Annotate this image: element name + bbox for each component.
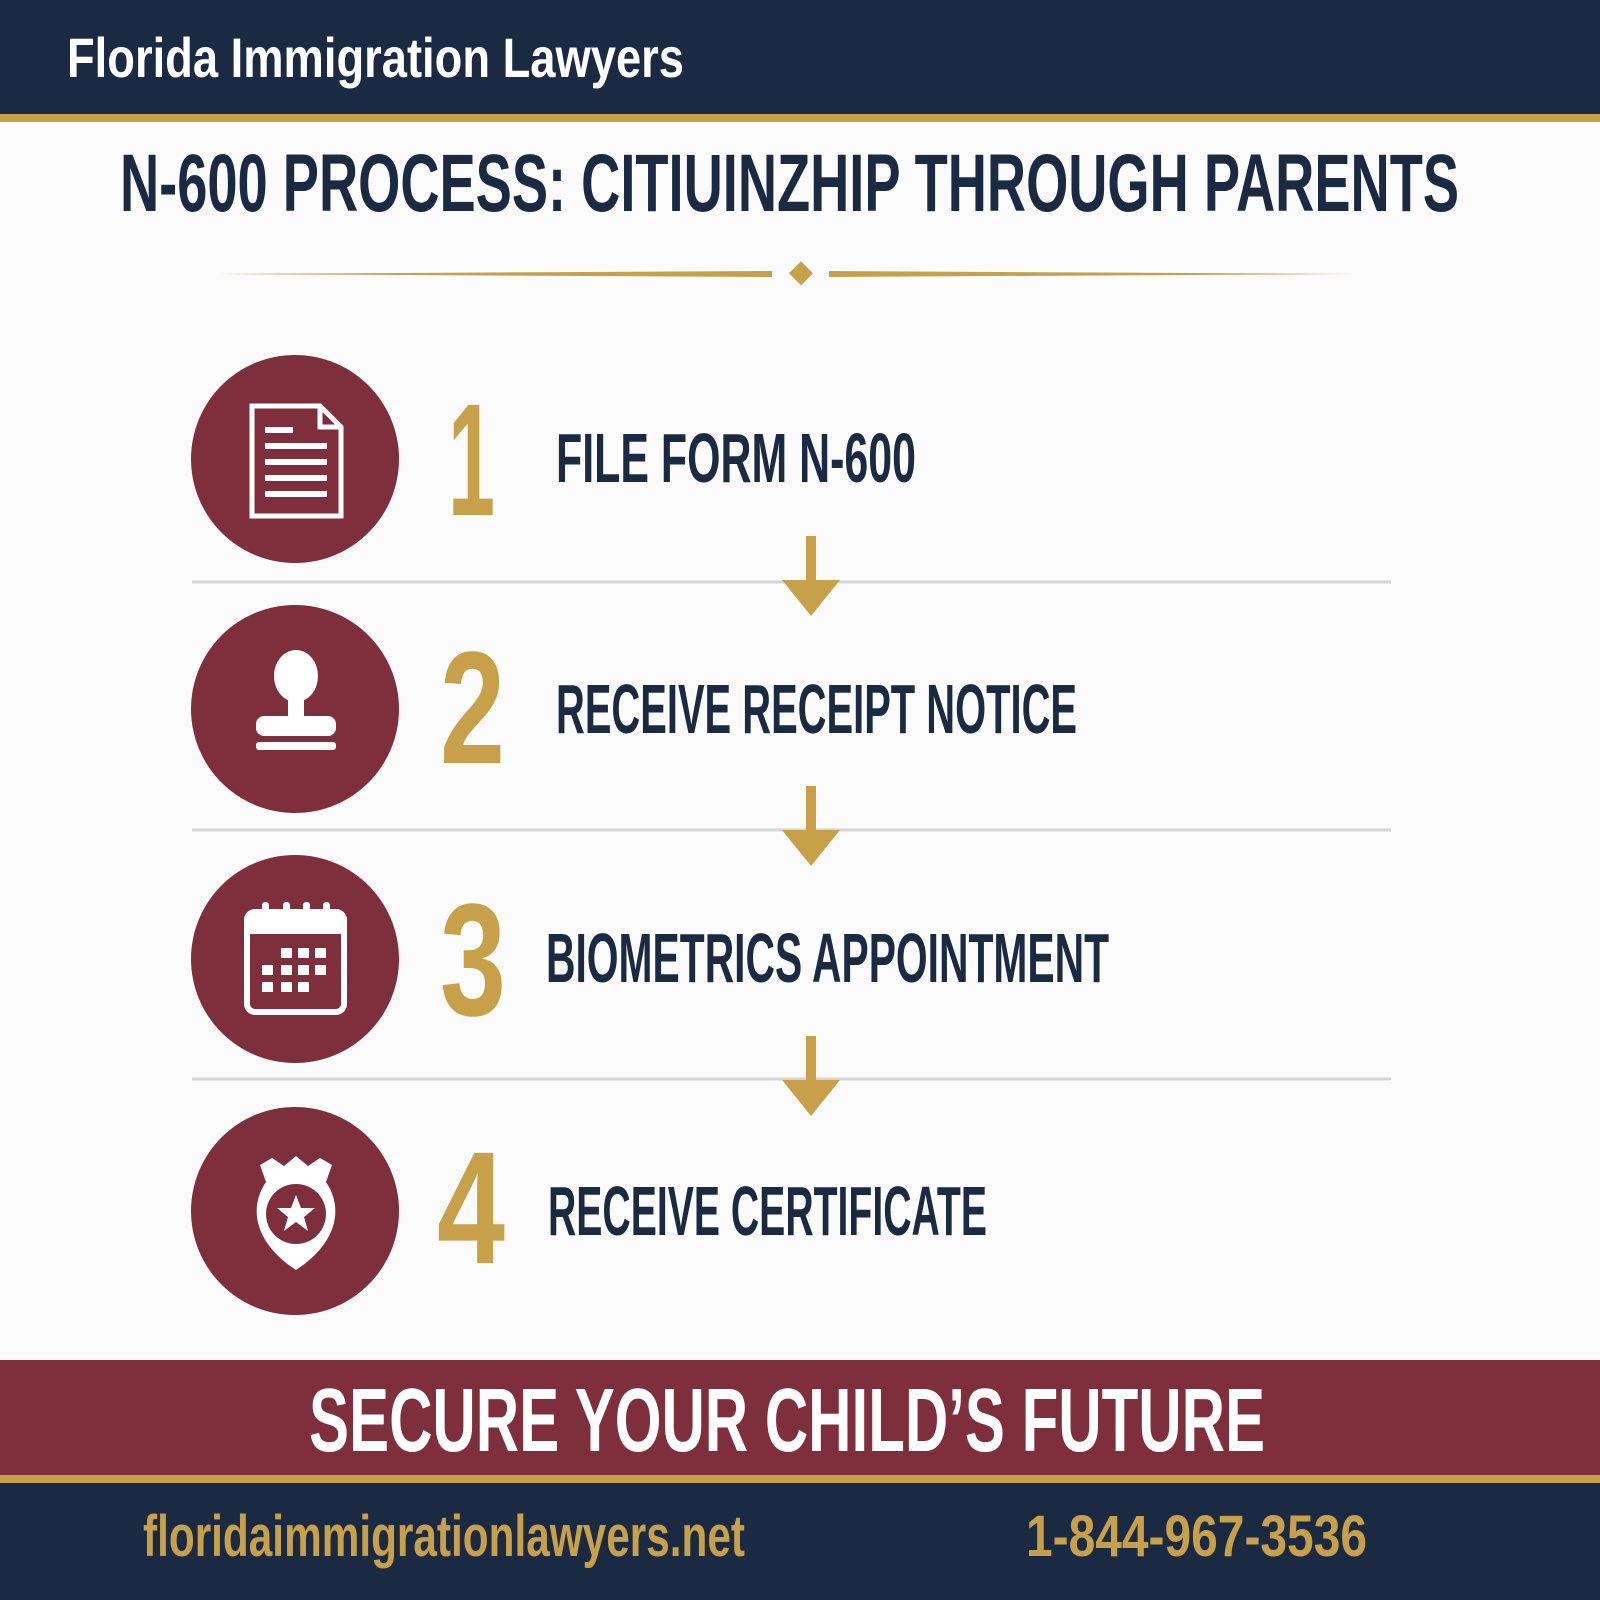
header bar xyxy=(0,0,1600,122)
header bar: Florida Immigration Lawyers xyxy=(67,26,684,89)
footer xyxy=(0,1483,1600,1600)
icon: badge xyxy=(257,1156,335,1270)
step 4 xyxy=(191,1107,987,1315)
step 4: 4 xyxy=(437,1118,505,1297)
step 3: 3 xyxy=(440,870,506,1049)
step 3: BIOMETRICS APPOINTMENT xyxy=(546,919,1109,997)
step 1: FILE FORM N-600 xyxy=(556,419,916,497)
step 2: RECEIVE RECEIPT NOTICE xyxy=(556,670,1077,748)
step 2 xyxy=(191,605,1077,813)
step 2: 2 xyxy=(440,618,505,797)
step 1: 1 xyxy=(448,370,495,549)
step 4: RECEIVE CERTIFICATE xyxy=(548,1172,987,1250)
icon: stamp xyxy=(256,650,336,750)
icon: calendar xyxy=(247,902,344,1012)
step 1 xyxy=(191,355,916,563)
footer: 1-844-967-3536 xyxy=(1026,1504,1367,1569)
divider xyxy=(219,261,1357,285)
banner: secure your child's future xyxy=(0,1360,1600,1483)
separators xyxy=(192,582,1391,1079)
footer: floridaimmigrationlawyers.net xyxy=(143,1504,745,1569)
arrows xyxy=(782,536,840,1116)
icon: document xyxy=(252,406,341,516)
step 3 xyxy=(191,855,1109,1063)
